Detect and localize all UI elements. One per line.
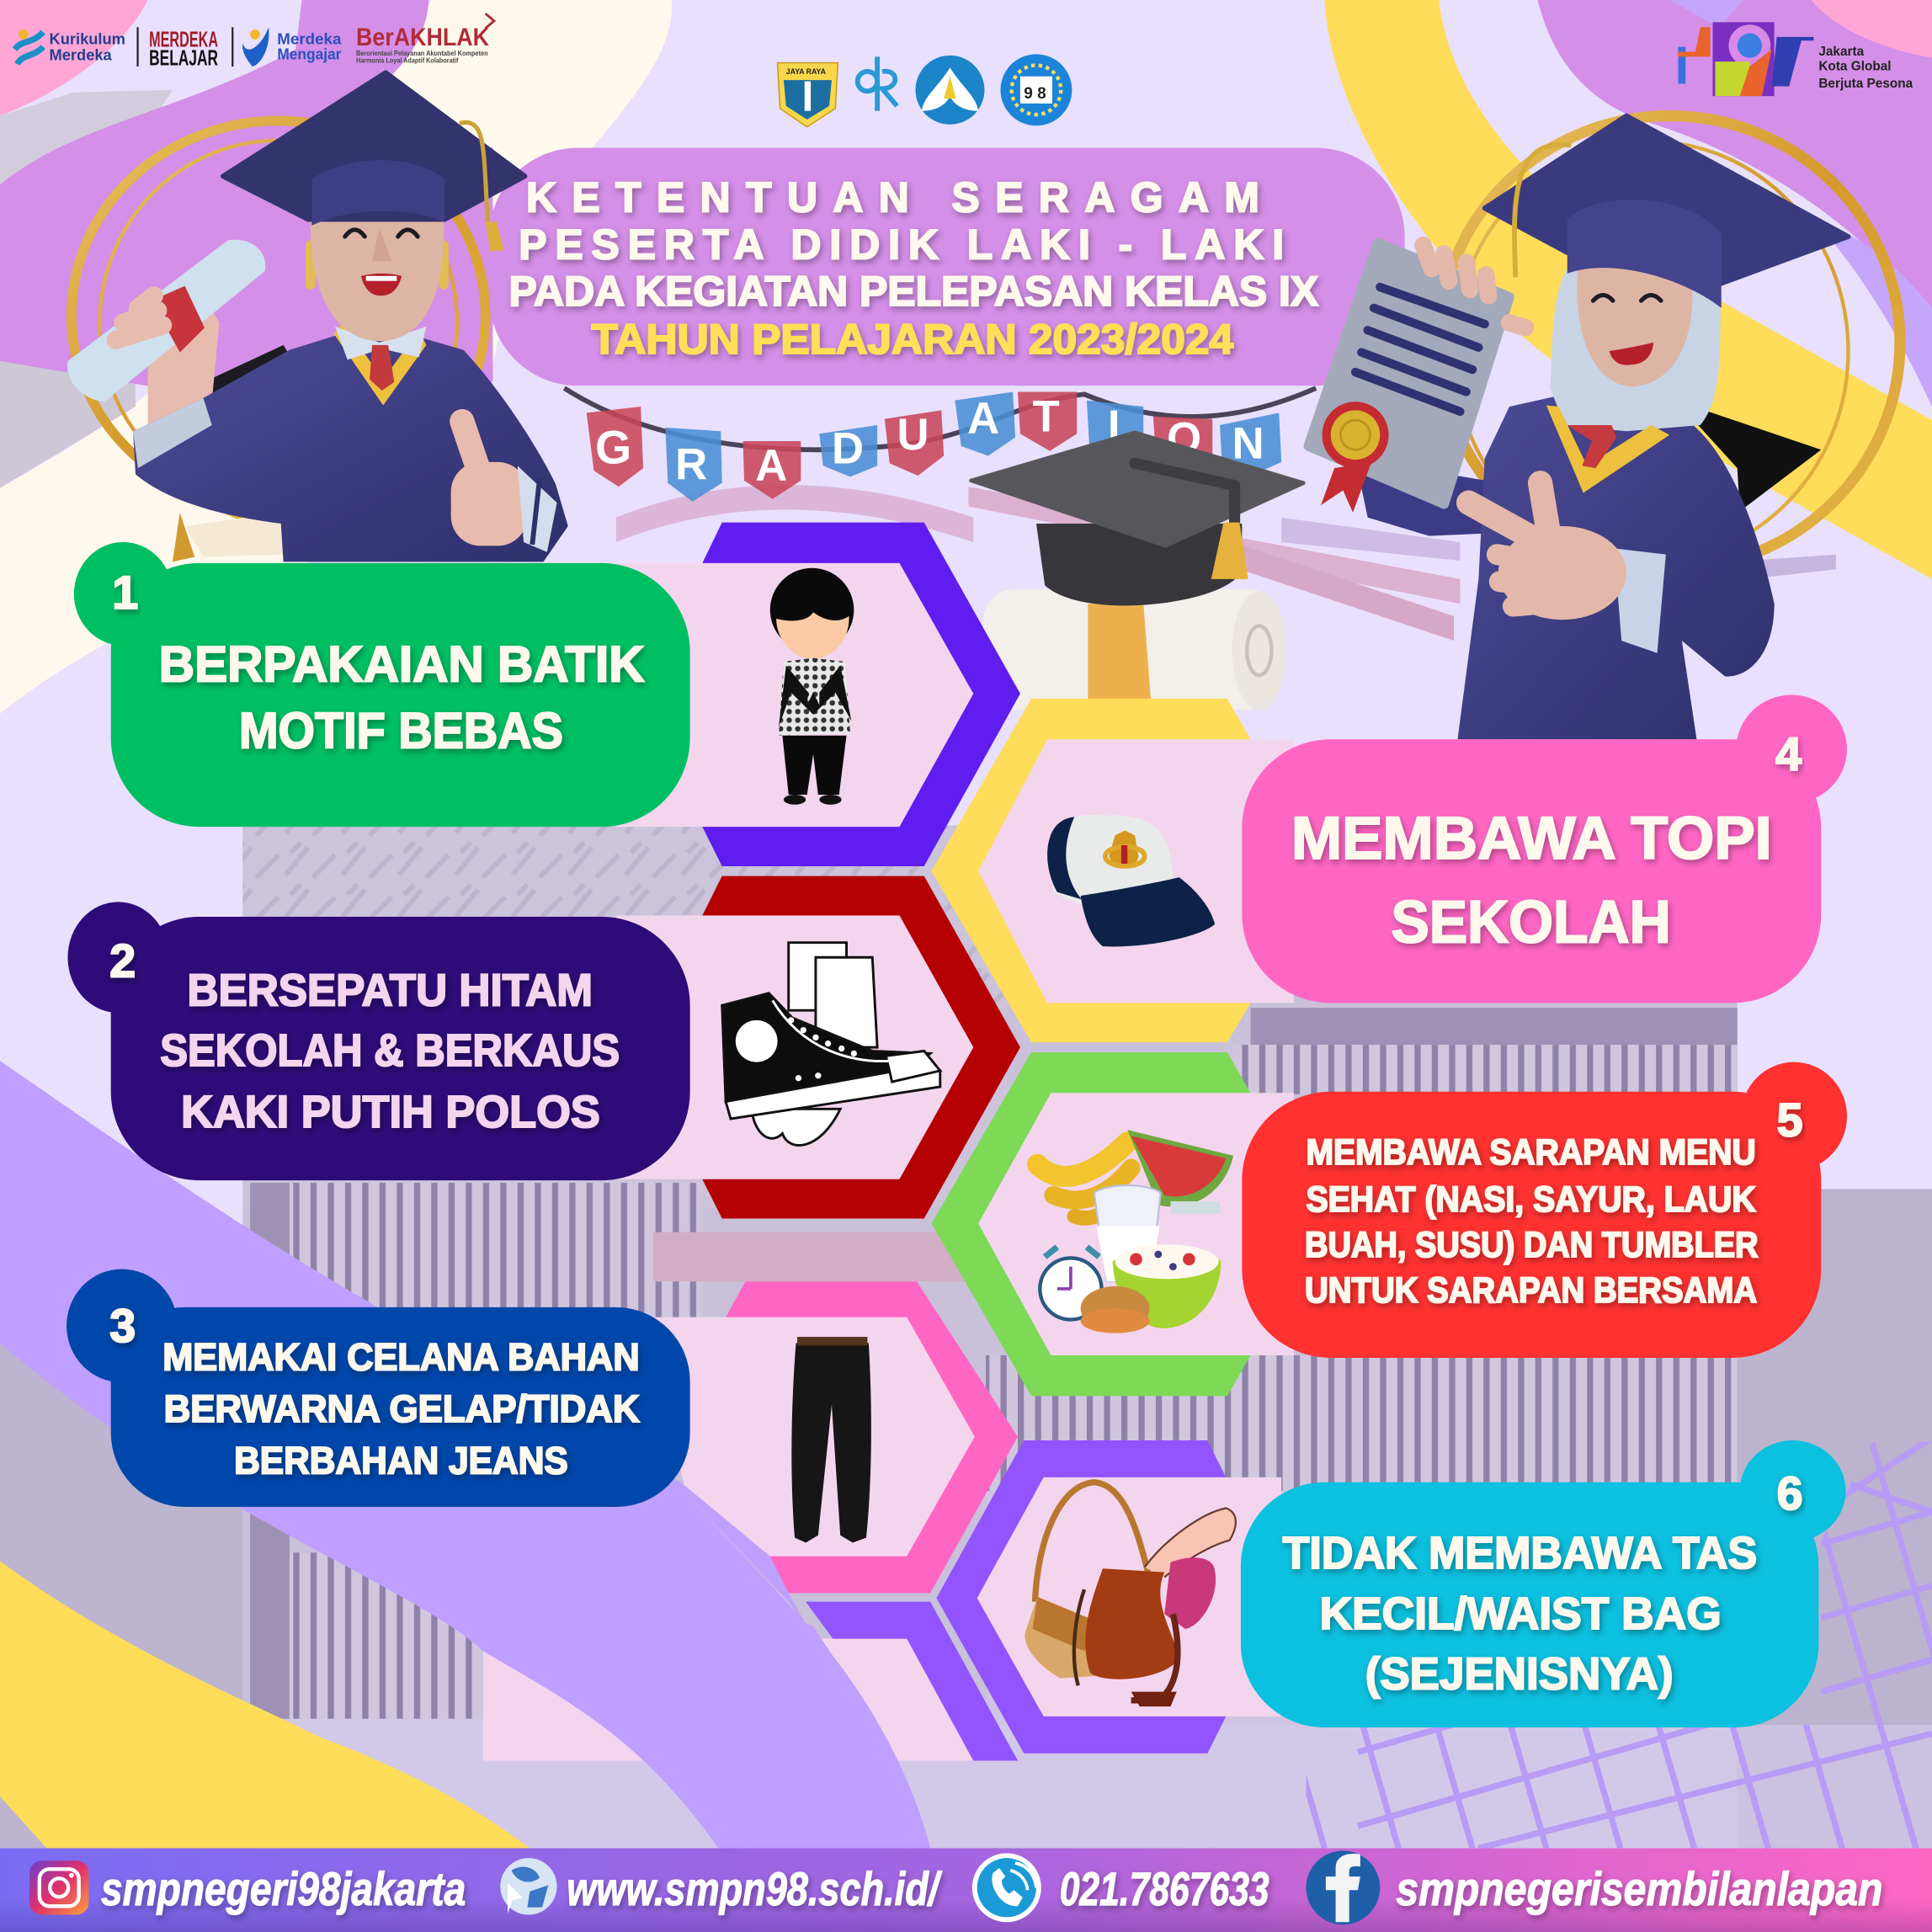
text 2: BERSEPATU HITAM bbox=[187, 965, 593, 1015]
number 5: 5 bbox=[1777, 1094, 1803, 1146]
boy diploma bbox=[67, 240, 265, 402]
icon: instagram bbox=[29, 1860, 88, 1915]
hexagon fill 3 bbox=[647, 1317, 975, 1557]
text box 4 bbox=[1242, 739, 1821, 1003]
icon: trousers bbox=[791, 1337, 871, 1542]
logos: ministry programme marks: BELAJAR bbox=[149, 45, 218, 71]
banner: GRADUATION bunting: O bbox=[1167, 414, 1201, 464]
icon: school cap bbox=[1047, 815, 1215, 946]
icon: phone bbox=[972, 1853, 1041, 1922]
hexagon frame 6 bbox=[936, 1440, 1226, 1754]
hexagon fill 4 bbox=[978, 739, 1294, 1003]
number 4: 4 bbox=[1775, 728, 1802, 780]
banner: GRADUATION bunting: G bbox=[595, 421, 631, 473]
text box 2 bbox=[111, 917, 690, 1180]
panel: item 4 bbox=[932, 695, 1847, 1042]
text 2: SEKOLAH & BERKAUS bbox=[160, 1025, 620, 1076]
background: lattice decoration bbox=[1307, 1441, 1932, 1849]
hexagon frame 5 bbox=[932, 1052, 1251, 1396]
illustration: girl graduate bbox=[1308, 116, 1848, 739]
background: top-left colour waves bbox=[0, 0, 672, 713]
lavender wave fill beside panel 3 bbox=[665, 1472, 807, 1626]
logos: ministry programme marks: Merdeka bbox=[50, 46, 113, 64]
text 4 bbox=[1291, 805, 1772, 956]
text 6: (SEJENISNYA) bbox=[1365, 1649, 1674, 1700]
girl tassel cord bbox=[1514, 145, 1571, 277]
hexagon fill 2 bbox=[616, 915, 973, 1179]
text 4: MEMBAWA TOPI bbox=[1291, 805, 1772, 872]
girl collar and tie bbox=[1546, 406, 1669, 492]
text 1: MOTIF BEBAS bbox=[239, 702, 563, 758]
text 6: KECIL/WAIST BAG bbox=[1320, 1589, 1722, 1639]
logos: ministry programme marks: Berorientasi Pelayanan Akuntabel Kompeten bbox=[356, 50, 488, 57]
logos: ministry programme marks: Kurikulum bbox=[50, 30, 125, 48]
background: school photo bbox=[0, 485, 1932, 1848]
banner: GRADUATION bunting: D bbox=[832, 423, 864, 473]
number badge 5 bbox=[1741, 1062, 1847, 1170]
gold ring behind boy bbox=[72, 120, 486, 510]
logo: Jaya Raya shield: JAYA RAYA bbox=[786, 67, 827, 76]
icon: breakfast food bbox=[1037, 1130, 1233, 1333]
text box 3 bbox=[111, 1307, 690, 1507]
number badge 6 bbox=[1740, 1440, 1846, 1541]
hexagon frame 3 bbox=[726, 1281, 1018, 1593]
girl hijab bbox=[1550, 265, 1722, 431]
boy fingers bbox=[116, 295, 162, 340]
icon: globe bbox=[500, 1858, 557, 1915]
text 5: BUAH, SUSU) DAN TUMBLER bbox=[1305, 1225, 1759, 1264]
number badge 2 bbox=[68, 902, 169, 1013]
text box 5 bbox=[1242, 1092, 1821, 1358]
hexagon fill 6 bbox=[977, 1477, 1281, 1716]
panel: item 2 bbox=[68, 876, 1020, 1219]
boy mortarboard bbox=[223, 72, 525, 220]
girl certificate bbox=[1308, 242, 1509, 513]
decor: black mortarboard behind girl bbox=[1676, 401, 1821, 511]
number 3: 3 bbox=[109, 1300, 136, 1352]
icon: center mortarboard and scroll bbox=[971, 433, 1304, 710]
boy gown bbox=[133, 333, 568, 562]
footer: social media bar bbox=[0, 1848, 1932, 1932]
hexagon frame 1 bbox=[702, 523, 1020, 866]
number badge 4 bbox=[1736, 695, 1847, 803]
hexagon fill 1 bbox=[616, 563, 973, 827]
logos: ministry programme marks: MERDEKA bbox=[149, 27, 218, 52]
number badge 1 bbox=[74, 542, 173, 646]
instagram handle: smpnegeri98jakarta bbox=[101, 1863, 466, 1915]
text 3: MEMAKAI CELANA BAHAN bbox=[162, 1336, 640, 1379]
text: Jakarta tagline: Berjuta Pesona bbox=[1818, 77, 1913, 91]
logo: SMPN 98 bbox=[1000, 54, 1072, 125]
text 5: MEMBAWA SARAPAN MENU bbox=[1306, 1132, 1756, 1172]
title line 4: TAHUN PELAJARAN 2023/2024 bbox=[592, 316, 1233, 363]
icon: sneaker and socks bbox=[722, 943, 940, 1145]
background: bottom-left colour waves bbox=[0, 1061, 930, 1848]
girl pointing hand bbox=[1469, 483, 1666, 653]
logo: Tut Wuri Handayani bbox=[915, 56, 984, 125]
panel: item 1 bbox=[74, 523, 1020, 866]
banner: GRADUATION bunting: A bbox=[755, 441, 787, 491]
illustration: boy graduate bbox=[67, 72, 568, 562]
boy thumbs-up hand bbox=[451, 422, 557, 552]
title line 2: PESERTA DIDIK LAKI - LAKI bbox=[519, 221, 1284, 268]
girl cap dome bbox=[1567, 200, 1722, 308]
gold ring behind girl bbox=[1440, 116, 1900, 569]
panel: title background bbox=[489, 148, 1405, 386]
text: Jakarta tagline bbox=[1818, 45, 1913, 91]
number 6: 6 bbox=[1777, 1467, 1803, 1520]
text 6 bbox=[1283, 1528, 1757, 1700]
title line 3: PADA KEGIATAN PELEPASAN KELAS IX bbox=[508, 268, 1318, 315]
girl gown bbox=[1457, 394, 1775, 739]
text 3: BERBAHAN JEANS bbox=[234, 1440, 568, 1482]
boy head bbox=[306, 210, 449, 341]
text 3 bbox=[162, 1336, 640, 1482]
text 5: UNTUK SARAPAN BERSAMA bbox=[1305, 1270, 1757, 1310]
text 5 bbox=[1305, 1132, 1759, 1310]
title line 1: KETENTUAN SERAGAM bbox=[526, 174, 1259, 221]
number 2: 2 bbox=[109, 935, 136, 987]
boy tassel bbox=[460, 122, 504, 252]
decor: black mortarboard behind boy bbox=[173, 345, 321, 562]
banner: GRADUATION bunting: I bbox=[1108, 402, 1120, 451]
text 4: SEKOLAH bbox=[1391, 889, 1671, 956]
hexagon frame 4 bbox=[932, 699, 1251, 1042]
icon: boy in batik bbox=[770, 568, 854, 805]
banner: GRADUATION bunting bbox=[564, 388, 1316, 502]
number badge 3 bbox=[67, 1269, 178, 1382]
number 1: 1 bbox=[112, 567, 138, 619]
text 2: KAKI PUTIH POLOS bbox=[181, 1087, 600, 1137]
logos: ministry programme marks: BerAKHLAK bbox=[356, 24, 489, 51]
logo: DPR mark bbox=[858, 56, 897, 111]
logos: ministry programme marks bbox=[15, 13, 494, 71]
panel: item 3 bbox=[67, 1269, 1018, 1626]
panel: item 7 hidden hexagon bbox=[483, 1589, 1018, 1848]
boy collar and tie bbox=[334, 322, 426, 406]
banner: GRADUATION bunting: R bbox=[675, 439, 707, 489]
banner: GRADUATION bunting: T bbox=[1033, 391, 1060, 441]
hexagon fill 5 bbox=[978, 1093, 1294, 1355]
logos: ministry programme marks: Harmonis Loyal Adaptif Kolaboratif bbox=[356, 57, 459, 65]
logo: SMPN 98: 9 8 bbox=[1024, 85, 1046, 103]
text: Jakarta tagline: Kota Global bbox=[1818, 59, 1892, 73]
banner: GRADUATION bunting: N bbox=[1232, 418, 1264, 468]
girl top hand bbox=[1424, 245, 1525, 327]
text 6: TIDAK MEMBAWA TAS bbox=[1283, 1528, 1757, 1578]
boy cap dome bbox=[311, 160, 444, 226]
text 3: BERWARNA GELAP/TIDAK bbox=[164, 1387, 640, 1430]
text 2 bbox=[160, 965, 620, 1137]
title text bbox=[508, 174, 1318, 363]
text 1: BERPAKAIAN BATIK bbox=[159, 636, 644, 692]
icon: facebook bbox=[1306, 1850, 1380, 1924]
text box 1 bbox=[111, 563, 690, 827]
logos: ministry programme marks: Mengajar bbox=[277, 45, 341, 62]
text 1 bbox=[159, 636, 644, 758]
girl paper arm bbox=[1355, 458, 1565, 536]
logo: Jaya Raya shield bbox=[778, 63, 838, 127]
girl mortarboard bbox=[1485, 116, 1848, 284]
logo: Jakarta 497 bbox=[1678, 22, 1813, 96]
boy sleeve cuff bbox=[133, 398, 212, 468]
text 5: SEHAT (NASI, SAYUR, LAUK bbox=[1306, 1179, 1756, 1219]
banner: GRADUATION bunting: A bbox=[967, 394, 999, 444]
panel: item 5 bbox=[932, 1052, 1847, 1396]
banner: GRADUATION bunting: U bbox=[897, 410, 929, 460]
boy palm bbox=[148, 295, 220, 425]
icon: bags bbox=[1025, 1482, 1236, 1706]
text: Jakarta tagline: Jakarta bbox=[1818, 45, 1865, 59]
panel: item 6 bbox=[936, 1440, 1846, 1754]
text box 6 bbox=[1241, 1482, 1818, 1727]
logos: ministry programme marks: Merdeka bbox=[277, 30, 342, 48]
website: www.smpn98.sch.id/ bbox=[567, 1863, 943, 1915]
hexagon frame 2 bbox=[702, 876, 1020, 1219]
background: top-right colour waves bbox=[1324, 0, 1932, 579]
phone number: 021.7867633 bbox=[1060, 1863, 1269, 1915]
